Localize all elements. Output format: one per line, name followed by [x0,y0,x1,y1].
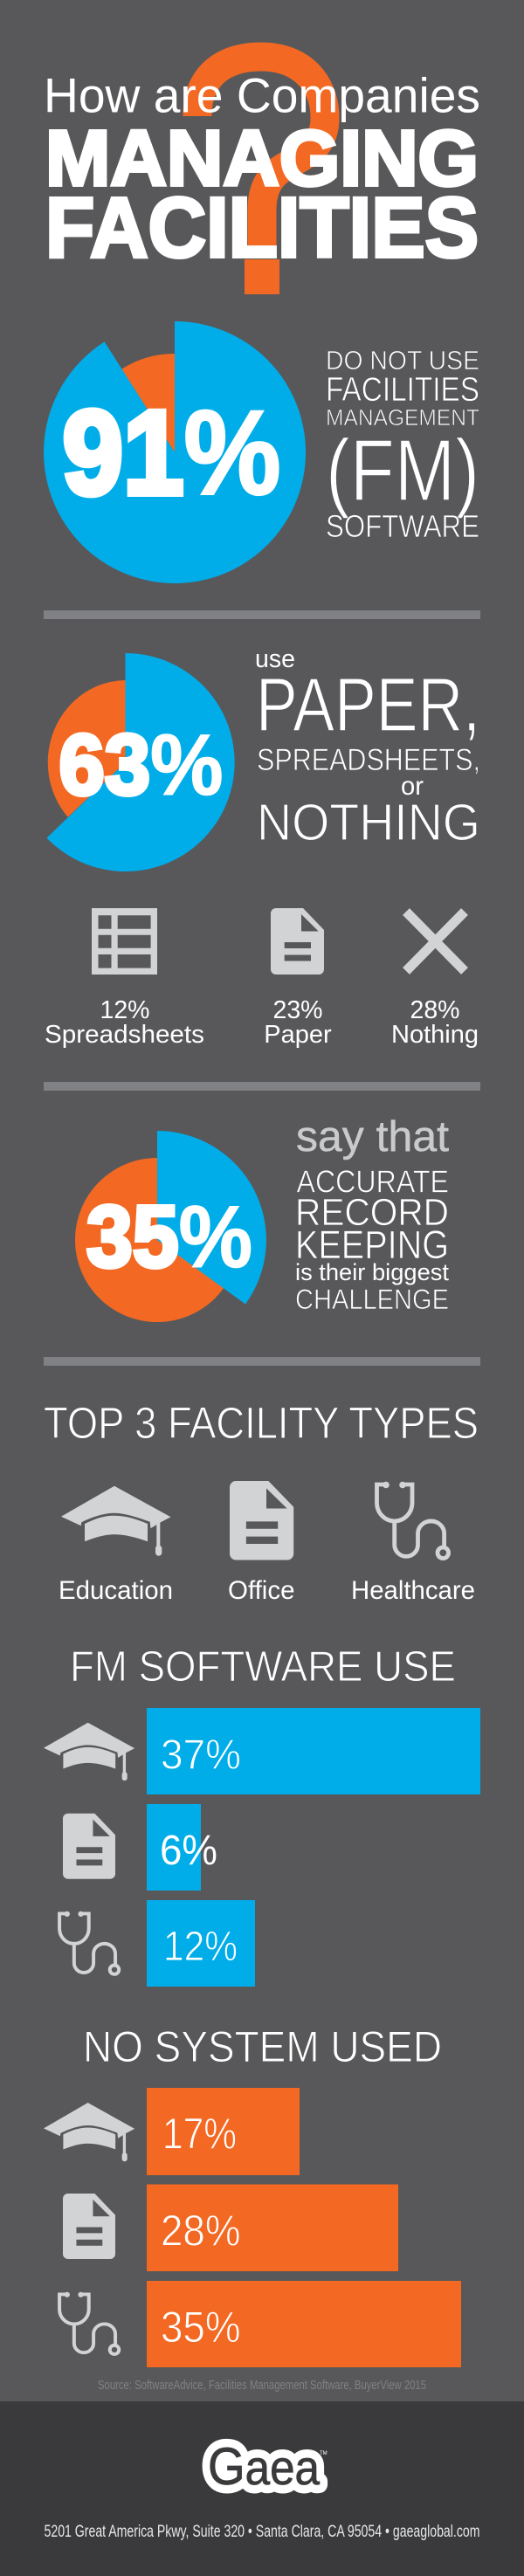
bar: healthcare 12% [147,1900,255,1987]
pie chart: 63% [47,653,235,871]
text block: accurate record keeping [295,1113,449,1315]
label: 23% Paper [264,996,332,1049]
text block: paper, spreadsheets, or nothing: NOTHING [257,794,480,851]
bar: education 37% [147,1708,480,1794]
text block: FM software: (FM) [326,422,479,520]
logo: Gaea: Gaea [208,2437,321,2496]
bar: healthcare 12%: 12% [163,1924,238,1970]
panel: 35% stat [75,1113,449,1322]
text block: accurate record keeping: ACCURATE [297,1163,449,1200]
heading: TOP 3 FACILITY TYPES: TOP 3 FACILITY TYPES [44,1398,479,1448]
text block: paper, spreadsheets, or nothing: SPREADSHEETS, [257,743,480,777]
text block: FM software: DO NOT USE [326,346,479,375]
panel: 63% stat [47,645,480,871]
label: Education: Education [59,1576,173,1605]
text block: FM software [326,346,479,544]
source note: Source: SoftwareAdvice, Facilities Management Software, BuyerView 2015 [98,2379,426,2393]
icon: spreadsheet [92,908,157,975]
number: 35%: 35% [86,1188,252,1285]
label: 23% Paper: 23% [272,996,323,1024]
bar: office 28%: 28% [161,2206,241,2255]
heading: FM SOFTWARE USE: FM SOFTWARE USE [70,1643,456,1691]
bar: office 28% [147,2185,398,2271]
text block: paper, spreadsheets, or nothing: PAPER, [256,663,480,747]
bar: education 17% [147,2088,300,2175]
label: 28% Nothing [391,996,479,1049]
logo: Gaea: Gaea [208,2437,321,2496]
label: 28% Nothing: Nothing [391,1021,479,1049]
icon: office document [230,1481,293,1560]
label: 12% Spreadsheets [45,996,204,1049]
icon: healthcare [59,2292,119,2354]
label: 12% Spreadsheets: Spreadsheets [45,1021,204,1049]
icon: paper [271,908,324,975]
icon: healthcare [59,1911,119,1974]
bar: office 6% [147,1804,217,1891]
pie chart: 91% [44,321,306,583]
number: 91%: 91% [63,386,281,520]
icon: education [44,1723,134,1780]
icon: office [63,1814,115,1879]
label: Healthcare: Healthcare [351,1576,475,1605]
label: 23% Paper: Paper [264,1021,332,1049]
icon: X [406,912,465,971]
title line: MANAGING: MANAGING [45,115,479,203]
title line: FACILITIES: FACILITIES [45,180,479,275]
label: 28% Nothing: 28% [410,996,460,1024]
text block: accurate record keeping: KEEPING [295,1223,449,1267]
icon: graduation cap [61,1486,171,1556]
label: 12% Spreadsheets: 12% [100,996,150,1024]
footer [0,2401,524,2576]
icon: stethoscope [377,1482,449,1559]
pie chart: 35% [75,1131,266,1322]
bar: healthcare 35%: 35% [161,2303,241,2352]
text block: accurate record keeping: is their biggest [295,1259,449,1285]
number: 63%: 63% [59,716,224,812]
icon: education [44,2103,134,2161]
text block: paper, spreadsheets, or nothing: use [255,645,295,673]
heading: NO SYSTEM USED: NO SYSTEM USED [83,2022,442,2071]
bar: education 17%: 17% [162,2110,237,2159]
panel: breakdown icons [45,908,479,1049]
text block: FM software: FACILITIES [326,371,479,409]
panel: FM software use chart [44,1643,480,1987]
bar: healthcare 35% [147,2281,461,2367]
logo: Gaea: TM [320,2451,328,2456]
panel: top 3 facility types [44,1398,479,1605]
text block: accurate record keeping: RECORD [295,1191,449,1234]
icon: orange question mark [197,57,325,294]
panel: 91% stat [44,321,479,583]
text block: FM software: SOFTWARE [326,508,479,544]
panel: no system used chart [44,2022,461,2367]
text block: FM software: MANAGEMENT [326,404,479,430]
header [44,57,480,294]
label: Office: Office [228,1576,295,1605]
bar: education 37%: 37% [161,1732,241,1778]
icon: office [63,2194,115,2259]
text block: paper, spreadsheets, or nothing: or [401,772,424,801]
title line: How are Companies: How are Companies [44,68,480,122]
text block: accurate record keeping: CHALLENGE [295,1284,449,1315]
text block: accurate record keeping: say that [296,1113,449,1161]
text block: paper, spreadsheets, or nothing [255,645,480,851]
bar: office 6%: 6% [160,1828,217,1874]
